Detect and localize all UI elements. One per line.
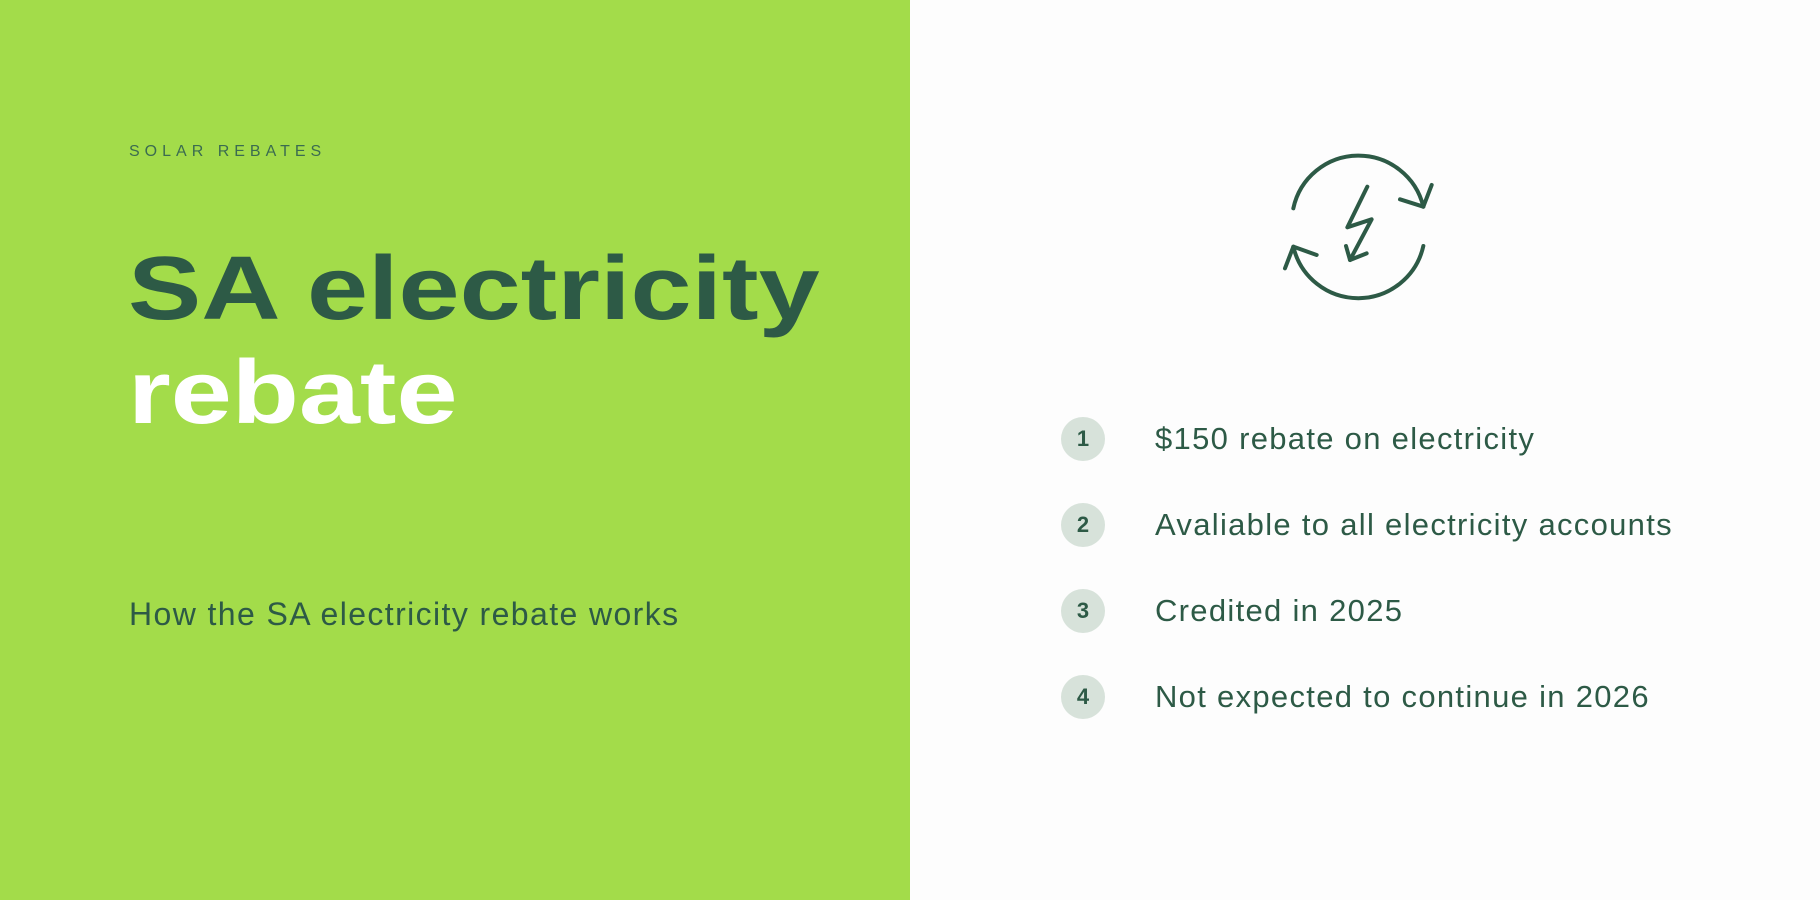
text: 3 [1077, 598, 1089, 623]
list item 1 [1061, 417, 1535, 461]
text: 4 [1077, 684, 1089, 709]
title [128, 239, 820, 443]
list item 2 [1061, 503, 1673, 547]
text: $150 rebate on electricity [1155, 421, 1535, 456]
title: SA electricity [128, 239, 820, 339]
title: rebate [128, 343, 458, 443]
list item 4 [1061, 675, 1650, 719]
text: Avaliable to all electricity accounts [1155, 507, 1673, 542]
eyebrow: SOLAR REBATES [129, 143, 326, 160]
icon: refresh bolt [1282, 154, 1434, 300]
text: 2 [1077, 512, 1089, 537]
text: Credited in 2025 [1155, 593, 1403, 628]
list item 3 [1061, 589, 1403, 633]
panel: green left [0, 0, 910, 900]
text: Not expected to continue in 2026 [1155, 679, 1650, 714]
text: 1 [1077, 426, 1089, 451]
subtitle: How the SA electricity rebate works [129, 596, 680, 632]
